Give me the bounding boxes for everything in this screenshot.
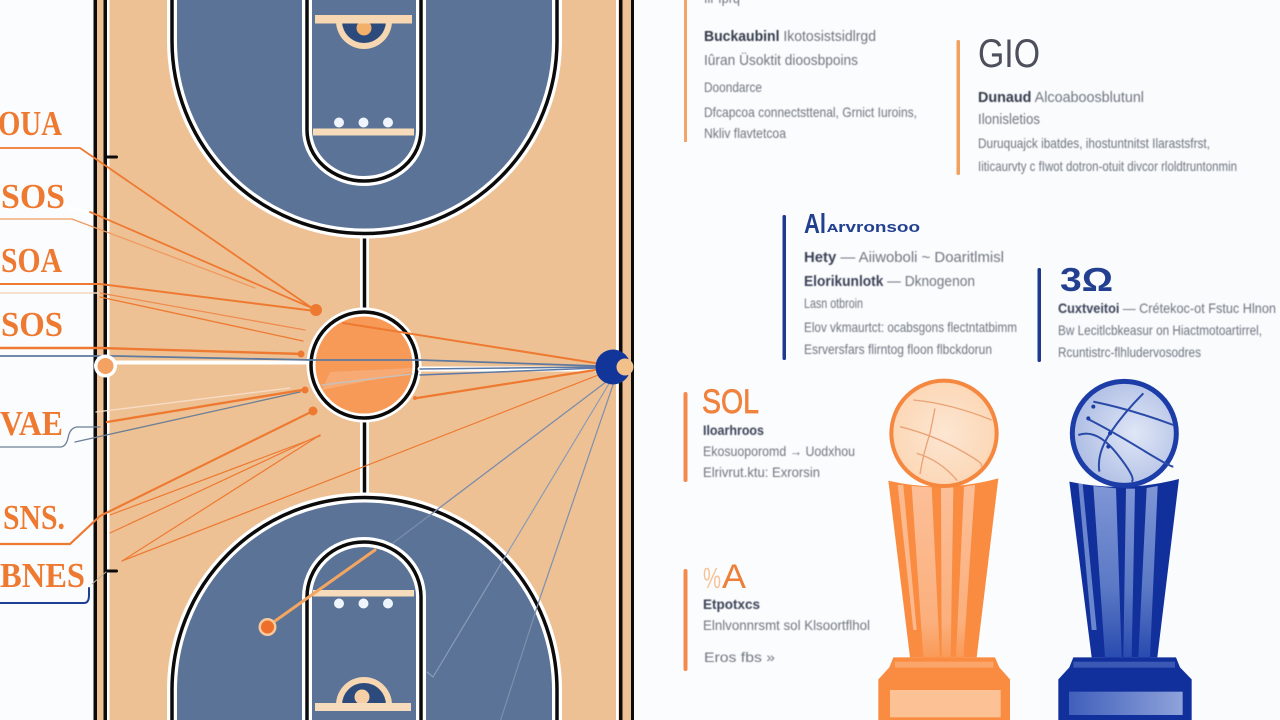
- text block 1: Dfcapcoa connectsttenal, Grnict Iuroins,: [704, 104, 917, 120]
- text block 2: GIO: Duruquajck ibatdes, ihostuntnitst Ilarastsfrst,: [978, 135, 1210, 151]
- connector lines: grey-blue and white: [0, 208, 614, 720]
- text block 3: navy: Hety — Aiiwoboli ~ Doaritlmisl: [804, 250, 1004, 266]
- text block 1: [684, 0, 917, 142]
- bottom key: [307, 542, 421, 720]
- callout label: OUA: OUA: [0, 104, 63, 143]
- text block 4: navy: 3Ω: [1060, 261, 1113, 298]
- text block 6: A: [684, 558, 870, 671]
- top key: [307, 0, 421, 181]
- text block 6: A: Elnlvonnrsmt sol Klsoortflhol: [703, 617, 870, 633]
- orange trophy cup: [888, 478, 998, 657]
- text block 6: A: %: [703, 563, 721, 595]
- text block 3: navy: [782, 208, 1017, 360]
- text block 5: SOL: Iloarhroos: [703, 422, 764, 438]
- right node: [596, 350, 634, 384]
- top hoop: [315, 15, 412, 49]
- text block 3: navy: Elorikunlotk — Dknogenon: [804, 274, 975, 290]
- orange trophy ball: [891, 381, 997, 486]
- blue trophy ball: [1072, 381, 1176, 485]
- text block 3: navy: Elov vkmaurtct: ocabsgons flectntatbimm: [804, 319, 1017, 335]
- text block 3: navy: Lasn otbroin: [804, 295, 863, 311]
- text block 1: Nkliv flavtetcoa: [704, 125, 786, 141]
- top half-court zone: [172, 0, 557, 233]
- text block 5: SOL: Elrivrut.ktu: Exrorsin: [703, 464, 820, 480]
- text block 1: Iûran Üsoktit dioosbpoins: [704, 51, 858, 69]
- centre circle: [306, 308, 422, 422]
- left node: [94, 354, 117, 378]
- text block 2: GIO: [956, 32, 1237, 175]
- bottom free-throw dots and bar: [313, 590, 414, 608]
- text block 5: SOL: [684, 383, 855, 482]
- blue trophy cup: [1069, 479, 1179, 657]
- blue trophy: [1058, 381, 1192, 720]
- bottom court node: [258, 618, 276, 636]
- callout label: VAE: VAE: [0, 404, 63, 443]
- centre line: [360, 225, 369, 500]
- text block 2: GIO: Ilonisletios: [978, 112, 1040, 128]
- text block 5: SOL: SOL: [702, 383, 759, 421]
- text block 2: GIO: GIO: [978, 32, 1040, 76]
- text block 5: SOL: Ekosuoporomd → Uodxhou: [703, 443, 855, 459]
- connector lines: orange: [0, 148, 606, 626]
- text block 3: navy: ᴀrvronsoo: [827, 219, 920, 236]
- orange trophy: [878, 381, 1010, 720]
- text block 2: GIO: Dunaud Alcoaboosblutunl: [978, 90, 1144, 106]
- text block 4: navy: [1038, 261, 1276, 362]
- text block 3: navy: Esrversfars ﬂirntog floon flbckdorun: [804, 341, 992, 357]
- callout label: SNS: SNS.: [3, 498, 65, 537]
- text block 6: A: Eros fbs »: [704, 649, 775, 665]
- connector end nodes: [298, 304, 417, 416]
- blue trophy base: [1058, 657, 1192, 720]
- text block 1: Buckaubinl Ikotosistsidlrgd: [704, 29, 876, 45]
- bottom hoop: [315, 677, 411, 711]
- bottom half-court zone: [172, 497, 557, 720]
- text block 3: navy: Al: [804, 208, 826, 239]
- callout label: SOS lower: SOS: [1, 305, 63, 344]
- basketball court: [94, 0, 634, 720]
- callout label: BNES: BNES: [0, 556, 85, 595]
- text block 6: A: A: [722, 558, 746, 596]
- text block 1: Doondarce: [704, 79, 762, 95]
- text block 4: navy: Rcuntistrc-flhludervosodres: [1058, 344, 1201, 360]
- orange trophy base: [878, 657, 1010, 720]
- text block 6: A: Etpotxcs: [703, 596, 760, 612]
- top free-throw dots and bar: [313, 118, 414, 136]
- callout label: SOA: SOA: [1, 241, 63, 280]
- callout label: SOS upper: SOS: [1, 177, 65, 216]
